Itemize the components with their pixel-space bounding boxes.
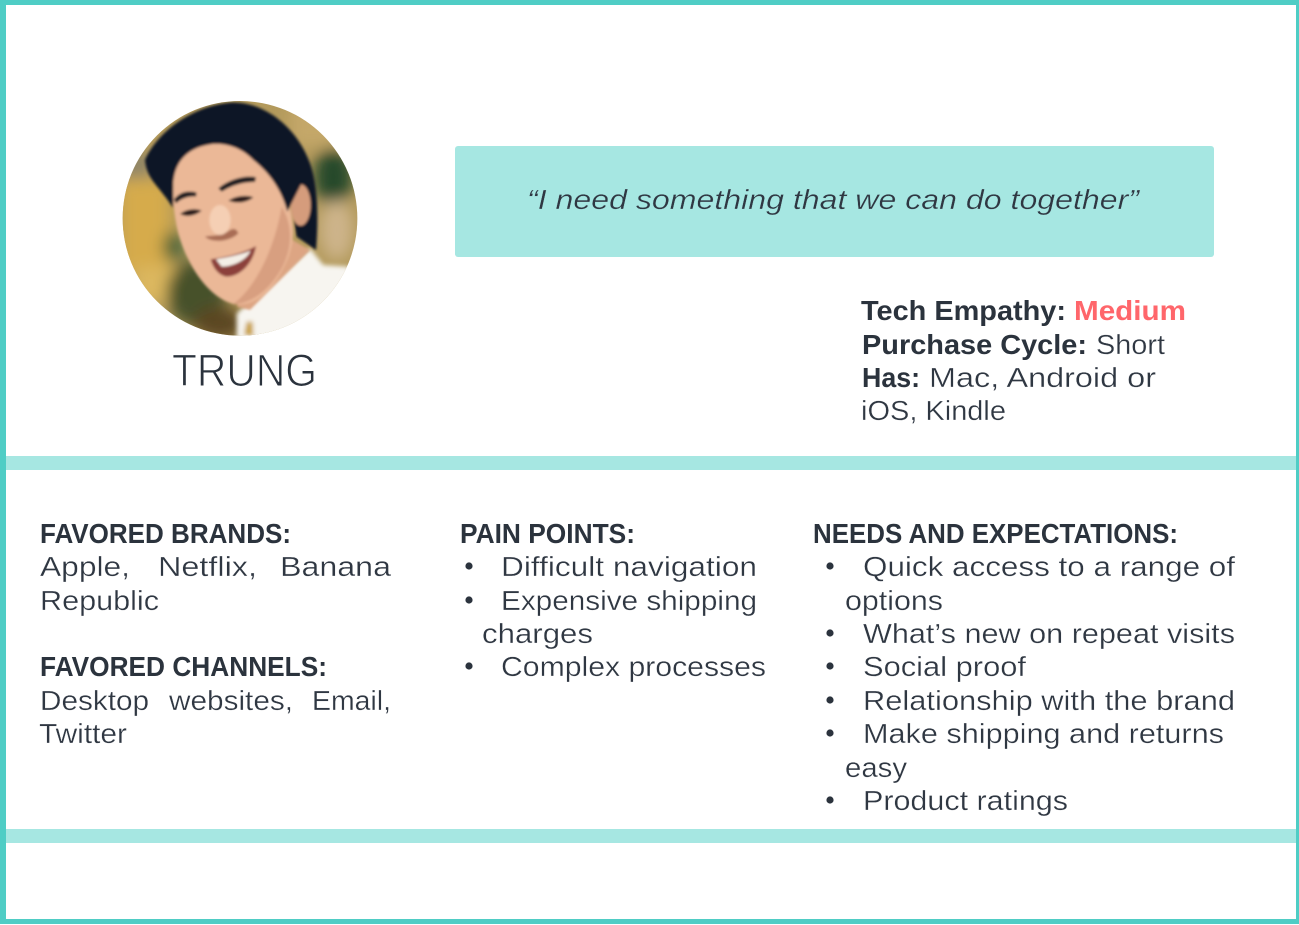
column: pain points: [460, 518, 766, 682]
shirt: [237, 248, 357, 343]
column: needs and expectations: What’s new on repeat visits: [863, 618, 1235, 649]
column: pain points: Difficult navigation: [501, 551, 757, 582]
column: favored brands and channels: Banana: [280, 551, 391, 582]
column: favored brands and channels: Desktop: [40, 685, 149, 716]
column: needs and expectations: Make shipping and returns: [863, 718, 1224, 749]
name: TRUNG: TRUNG: [172, 345, 317, 396]
column: favored brands and channels: Twitter: [39, 718, 127, 749]
column: favored brands and channels: FAVORED BRANDS:: [40, 518, 291, 549]
column: favored brands and channels: Email,: [312, 685, 391, 716]
column: pain points: charges: [482, 618, 593, 649]
column: needs and expectations: [813, 518, 1235, 816]
column: needs and expectations: options: [845, 585, 943, 616]
mouth: [211, 246, 256, 277]
attributes: tech empathy, purchase cycle, devices: Short: [1096, 329, 1165, 360]
column: favored brands and channels: [39, 518, 391, 749]
column: pain points: PAIN POINTS:: [460, 518, 635, 549]
eyes: [228, 196, 253, 202]
attributes: tech empathy, purchase cycle, devices: Purchase Cycle:: [862, 329, 1087, 360]
column: needs and expectations: NEEDS AND EXPECTATIONS:: [813, 518, 1178, 549]
column: favored brands and channels: FAVORED CHANNELS:: [40, 651, 327, 682]
column: needs and expectations: Quick access to a range of: [863, 551, 1235, 582]
column: pain points: Expensive shipping: [501, 585, 757, 616]
nose shadow: [205, 229, 238, 241]
attributes: tech empathy, purchase cycle, devices: iOS, Kindle: [861, 395, 1006, 426]
column: favored brands and channels: Netflix,: [158, 551, 257, 582]
column: needs and expectations: Relationship with the brand: [863, 685, 1235, 716]
attributes: tech empathy, purchase cycle, devices: Medium: [1074, 295, 1186, 326]
eyebrows: [218, 177, 256, 192]
column: needs and expectations: Product ratings: [863, 785, 1068, 816]
attributes: tech empathy, purchase cycle, devices: Has:: [862, 362, 920, 393]
quote box: “I need something that we can do together”: [527, 184, 1141, 215]
divider band: top: [6, 456, 1296, 470]
divider band: bottom: [6, 829, 1296, 843]
quote box: [455, 146, 1214, 257]
column: favored brands and channels: Apple,: [40, 551, 130, 582]
column: favored brands and channels: Republic: [40, 585, 159, 616]
portrait photo: [110, 100, 360, 343]
ear: [291, 184, 311, 226]
column: favored brands and channels: websites,: [168, 685, 293, 716]
attributes: tech empathy, purchase cycle, devices: Tech Empathy:: [861, 295, 1066, 326]
hair back: [145, 103, 317, 250]
column: pain points: Complex processes: [501, 651, 766, 682]
attributes: tech empathy, purchase cycle, devices: Mac, Android or: [929, 362, 1156, 393]
attributes: tech empathy, purchase cycle, devices: [861, 295, 1186, 426]
column: needs and expectations: Social proof: [863, 651, 1026, 682]
column: needs and expectations: easy: [845, 752, 907, 783]
forelock: [215, 140, 302, 212]
face: [173, 143, 293, 305]
neck: [237, 237, 310, 310]
